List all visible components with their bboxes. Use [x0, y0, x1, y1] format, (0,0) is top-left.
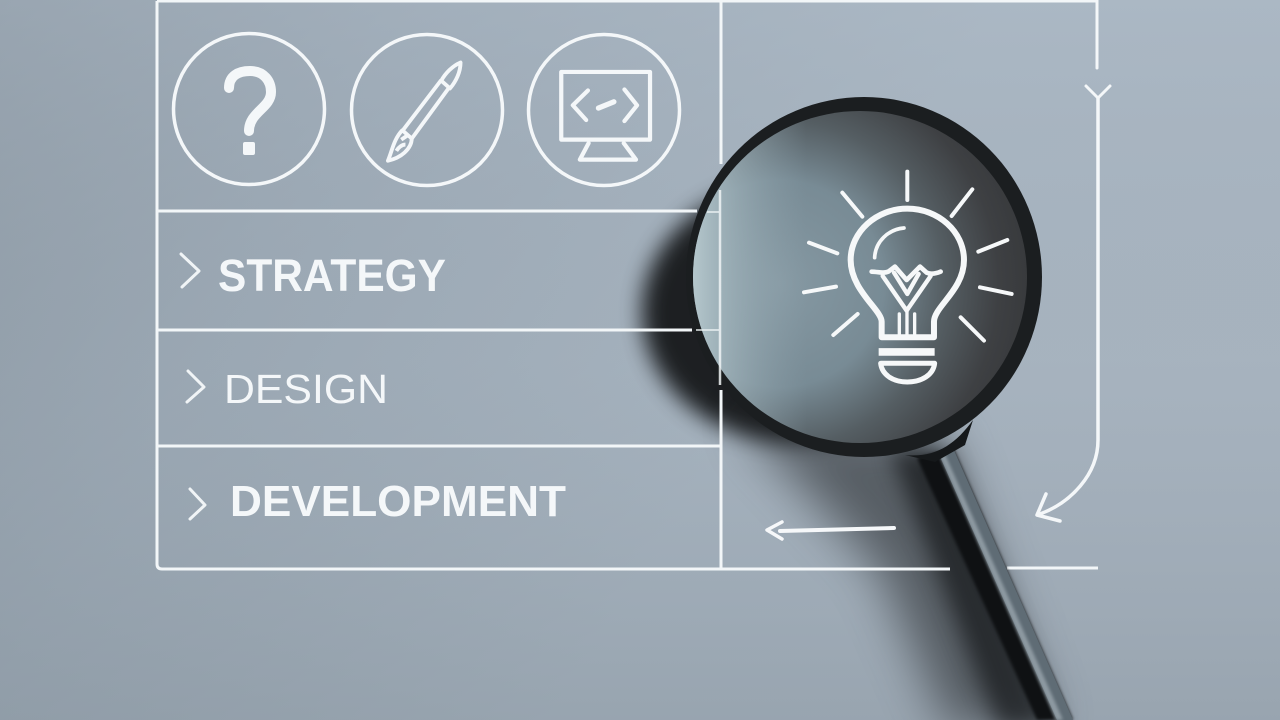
- icon: pen in circle: [352, 34, 502, 186]
- handle: [917, 448, 1073, 720]
- bulb base: [878, 348, 935, 356]
- arrow: left pointing: [767, 522, 894, 539]
- magnifier cast shadow: [642, 180, 1060, 720]
- lens rim: [686, 97, 1042, 457]
- row: design: DESIGN: [224, 366, 388, 412]
- magnifying glass: [686, 97, 1073, 720]
- refracted table lines in lens: [696, 190, 720, 385]
- row: strategy: STRATEGY: [218, 250, 446, 301]
- bulb glass: [851, 209, 964, 337]
- icon: light bulb: [804, 172, 1012, 382]
- icon: question mark in circle: [174, 34, 324, 184]
- lens glass: [693, 111, 1027, 443]
- bulb filament: [872, 267, 941, 280]
- row: development: DEVELOPMENT: [230, 477, 566, 526]
- icon: code monitor in circle: [528, 34, 680, 186]
- bulb rays: [804, 172, 1012, 341]
- handle joint: [905, 420, 973, 462]
- arrow: right side flow line: [1037, 0, 1110, 521]
- bulb highlight: [875, 228, 904, 258]
- table frame lines: [157, 0, 1098, 569]
